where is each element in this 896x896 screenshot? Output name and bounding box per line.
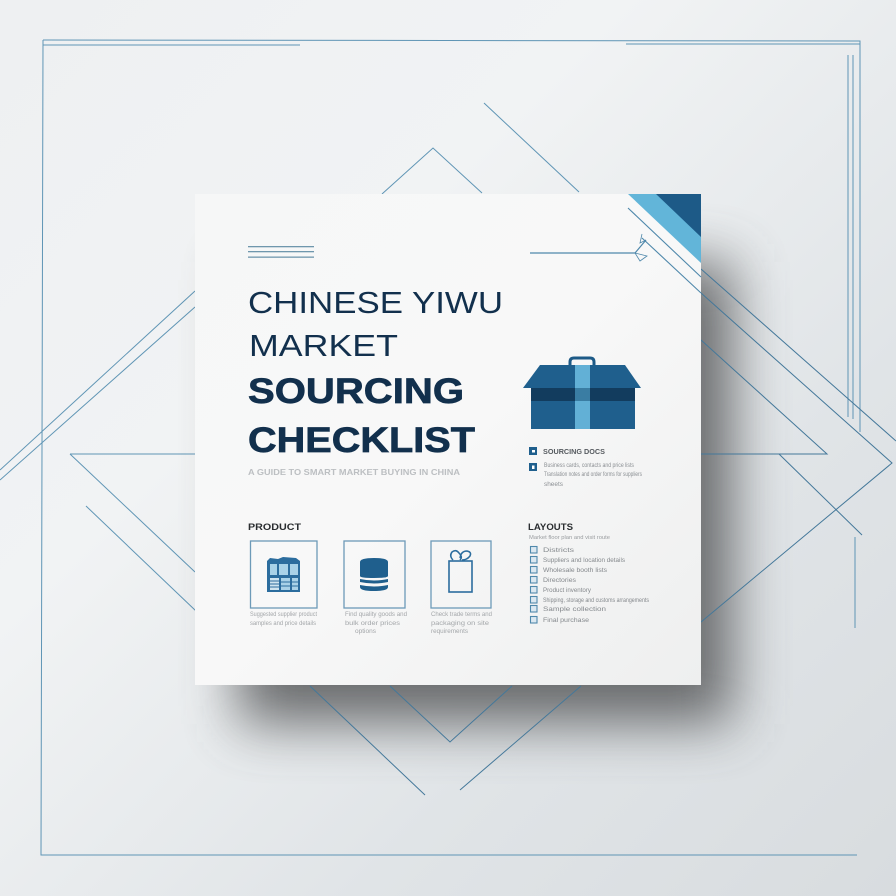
checklist row labels: Directories [543,577,577,584]
checklist: layouts: Market floor plan and visit route [529,535,610,541]
title: MARKET [249,328,398,363]
product card 1: catalog shelf: Suggested supplier product [250,612,317,618]
product card 3: gift bag: Check trade terms and [431,612,492,618]
title: CHECKLIST [248,421,475,460]
title: SOURCING [248,372,464,411]
subtitle: A GUIDE TO SMART MARKET BUYING IN CHINA [248,467,460,477]
product card 2: stacked goods: Find quality goods and [345,612,407,618]
product card 2: stacked goods [344,541,407,635]
checklist row labels: Shipping, storage and customs arrangements [543,597,650,604]
checklist row labels: Suppliers and location details [543,557,626,564]
arrow line with small tip [530,234,647,261]
feature notes: Translation notes and order forms for suppliers [544,472,642,478]
product card 3: gift bag: packaging on site [431,621,490,627]
feature notes: sheets [544,482,563,488]
panel: checklist card [195,194,701,685]
feature notes: Business cards, contacts and price lists [544,463,634,469]
checklist row labels: Final purchase [543,617,589,624]
checklist row squares [530,546,537,623]
lines over shadow [310,269,896,795]
checklist: layouts [528,522,650,624]
card drop shadow [238,262,733,724]
feature notes [529,447,642,488]
icon: storage box [523,358,641,429]
title: CHINESE YIWU [248,285,503,320]
checklist row labels: Districts [543,547,575,554]
product card 3: gift bag: requirements [431,629,468,635]
checklist row labels: Wholesale booth lists [543,567,608,574]
checklist heading: LAYOUTS [528,522,573,532]
product card 2: stacked goods: bulk order prices [345,621,400,627]
product card 1: catalog shelf [250,541,317,627]
checklist row labels [543,547,650,624]
corner ribbon [628,194,701,293]
product card 1: catalog shelf: samples and price details [250,621,316,627]
product card 3: gift bag [431,541,492,635]
checklist row labels: Product inventory [543,587,592,594]
checklist row labels: Sample collection [543,606,606,613]
title [248,285,503,460]
section heading: product: PRODUCT [248,522,302,532]
decorative heading rule [248,246,314,258]
feature notes: SOURCING DOCS [543,449,605,456]
section: product [248,522,492,635]
product card 2: stacked goods: options [355,629,376,635]
